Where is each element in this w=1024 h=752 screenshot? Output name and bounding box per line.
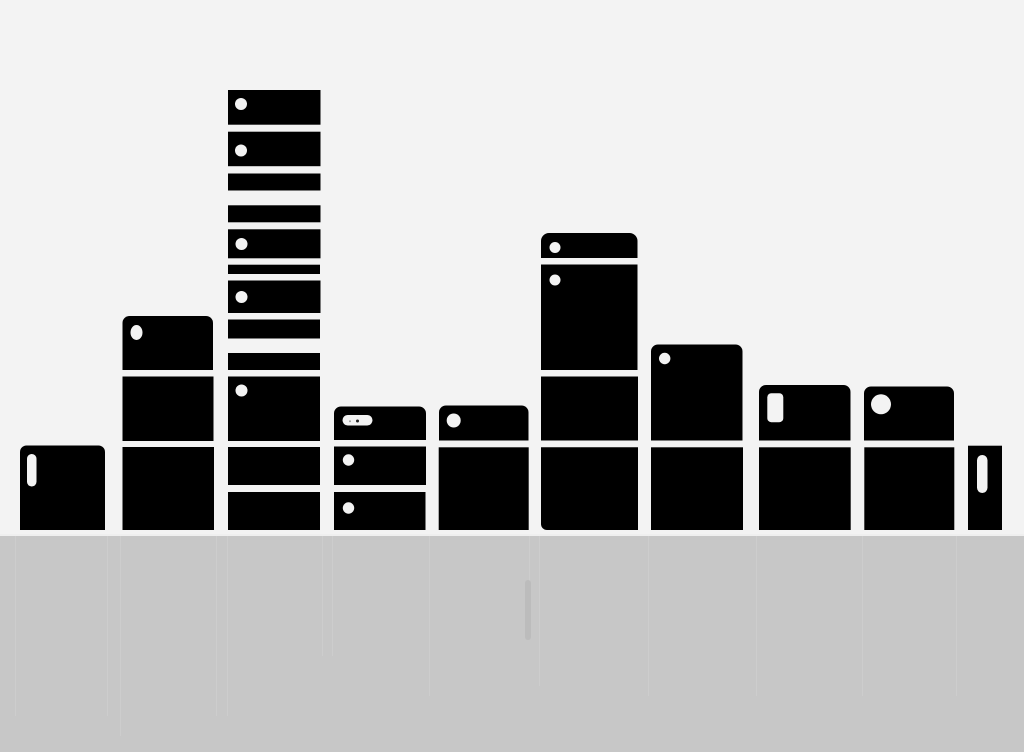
bar 10 — [968, 446, 1002, 530]
bar 5 — [439, 406, 529, 530]
bar 7 — [651, 344, 743, 530]
bar 3 — [228, 90, 320, 530]
bar 9 — [864, 386, 954, 530]
bar 6 — [541, 233, 638, 530]
floor band — [0, 534, 1024, 752]
bar 4 — [334, 406, 426, 530]
bar 1 — [20, 446, 105, 530]
bar 8 — [759, 385, 851, 530]
bar 2 — [122, 316, 214, 530]
